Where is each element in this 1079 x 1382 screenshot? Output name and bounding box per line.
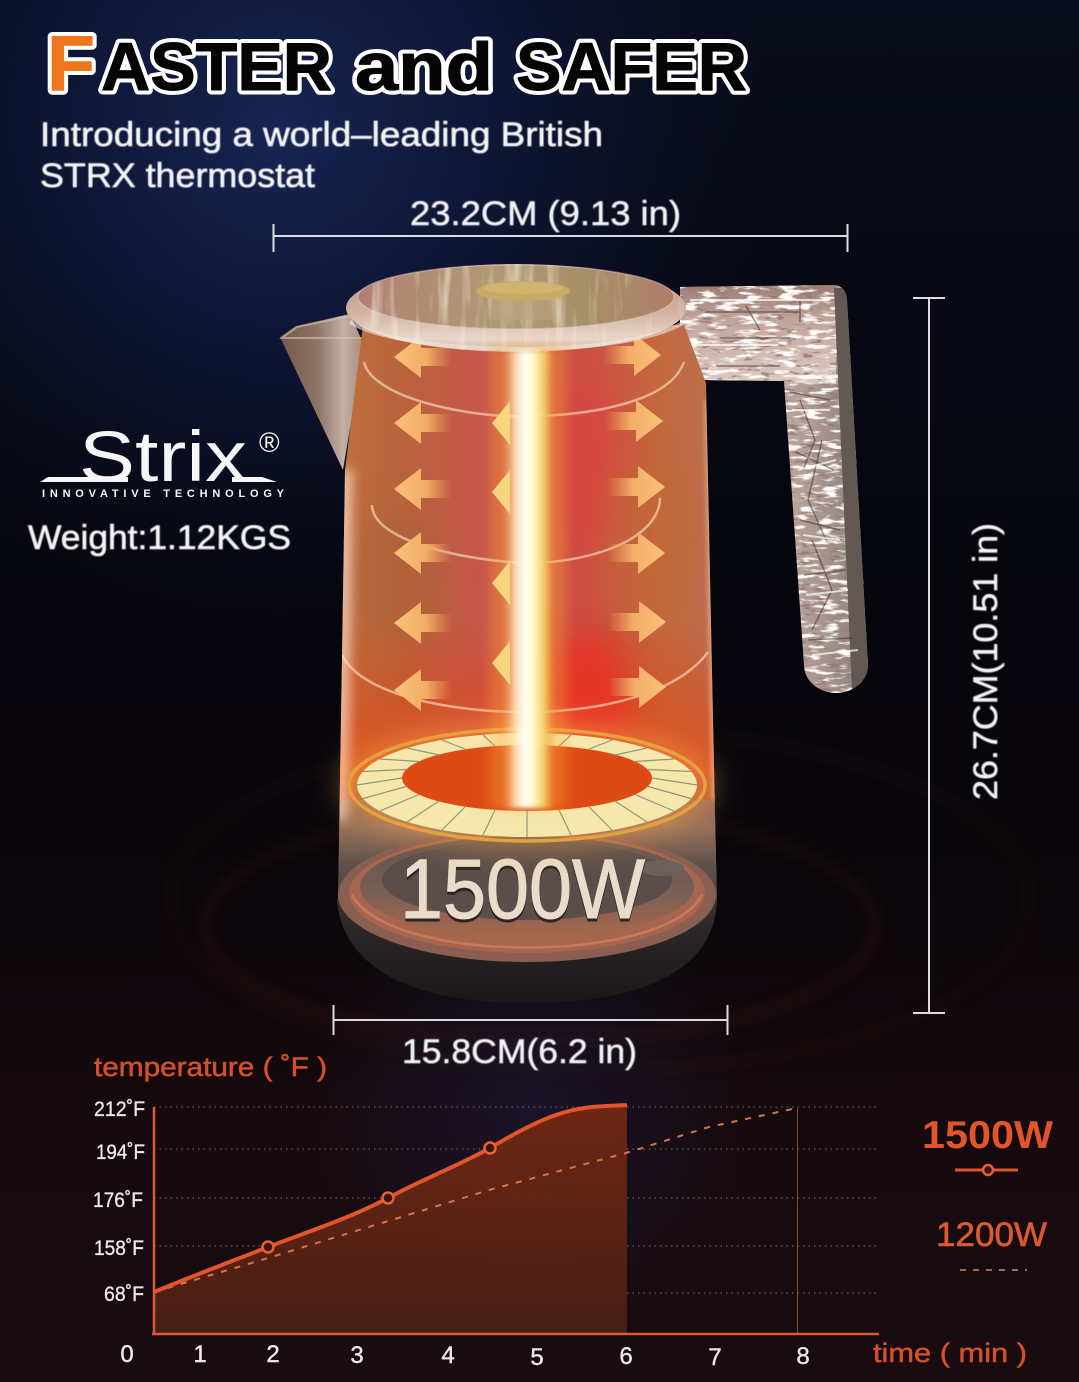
kettle handle (680, 285, 870, 695)
title: F (47, 19, 95, 107)
subtitle text: STRX thermostat (40, 157, 316, 195)
y axis labels: 212˚F (94, 1098, 145, 1121)
kettle lid (346, 264, 686, 352)
strix logo: ® (259, 427, 280, 458)
heating ring (342, 723, 712, 847)
axes (152, 1107, 879, 1335)
y axis labels: 176˚F (93, 1189, 143, 1212)
chart gridlines (154, 1107, 878, 1293)
title: SAFER (516, 29, 747, 105)
temperature chart (93, 1052, 1027, 1371)
kettle body glow (336, 320, 720, 910)
weight text: Weight:1.12KGS (28, 519, 291, 557)
y axis labels: 194˚F (96, 1141, 145, 1164)
x axis labels: 0 (120, 1341, 134, 1368)
1500W label on plate: 1500W (400, 842, 645, 936)
1500W solid line (154, 1105, 627, 1292)
1500W label on plate: 1500W (400, 845, 645, 939)
x axis labels: 2 (266, 1341, 280, 1368)
swirl arcs (342, 362, 708, 712)
title: ASTER (101, 29, 332, 105)
x axis labels: 8 (796, 1343, 810, 1370)
strix logo (40, 418, 285, 500)
x axis title: time ( min ) (873, 1338, 1027, 1368)
title: SAFER (516, 29, 747, 105)
kettle base (337, 828, 717, 1003)
heat arrows (394, 334, 666, 711)
y axis labels: 68˚F (104, 1283, 144, 1306)
legend: 1200W (936, 1216, 1047, 1254)
central heat beam (490, 345, 566, 810)
strix logo: Strix (79, 418, 247, 497)
subtitle text (40, 116, 603, 195)
x axis labels: 4 (441, 1342, 455, 1369)
x axis labels (120, 1341, 810, 1371)
width dimension: 23.2CM: 23.2CM (9.13 in) (410, 195, 681, 233)
1200W dashed line (154, 1108, 797, 1292)
height dimension: 26.7CM: 26.7CM(10.51 in) (967, 523, 1005, 800)
title: and (355, 29, 493, 105)
x axis labels: 6 (619, 1343, 633, 1370)
legend (922, 1114, 1053, 1270)
8 minute marker (796, 1108, 798, 1334)
title (47, 19, 747, 107)
curve markers (262, 1142, 496, 1252)
kettle spout (280, 314, 364, 470)
y axis labels (93, 1098, 145, 1306)
legend: 1500W (922, 1114, 1053, 1157)
x axis labels: 3 (350, 1342, 364, 1369)
x axis labels: 5 (530, 1344, 544, 1371)
kettle illustration (280, 264, 870, 1003)
strix logo: INNOVATIVE TECHNOLOGY (42, 488, 285, 500)
title: and (355, 29, 493, 105)
x axis labels: 1 (193, 1341, 207, 1368)
y axis title: temperature ( ˚F ) (94, 1052, 327, 1082)
heating plate (338, 828, 716, 962)
title: ASTER (101, 29, 332, 105)
base dimension: 15.8CM: 15.8CM(6.2 in) (402, 1033, 637, 1071)
subtitle text: Introducing a world–leading British (40, 116, 603, 154)
y axis labels: 158˚F (94, 1237, 144, 1260)
base dimension: 15.8CM (333, 1005, 728, 1071)
1500W area fill (154, 1105, 627, 1334)
x axis labels: 7 (708, 1344, 722, 1371)
height dimension: 26.7CM (913, 298, 1005, 1013)
title: F (47, 19, 95, 107)
width dimension: 23.2CM (273, 195, 848, 252)
